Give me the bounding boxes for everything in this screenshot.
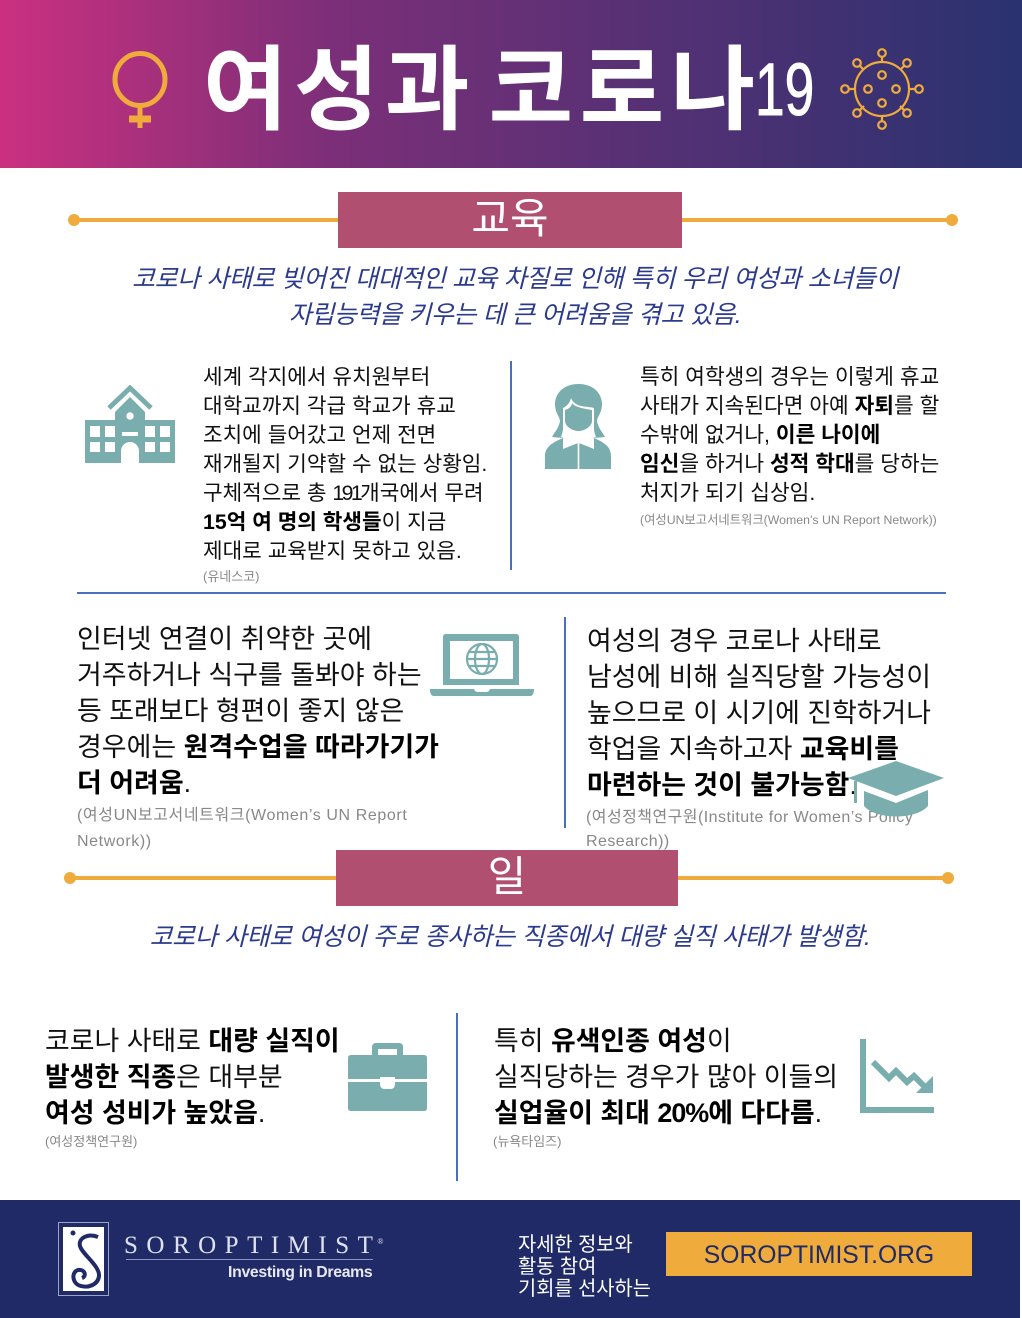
footer text: 자세한 정보와 [518,1234,633,1256]
title: 여성과 코로나 [203,40,762,142]
education intro: 자립능력을 키우는 데 큰 어려움을 겪고 있음. [289,301,741,329]
text: women of color: 특히 유색인종 여성이 [494,1026,732,1056]
text: remote learning: Network)) [77,833,152,850]
icon: graduation cap [848,761,944,816]
icon: virus [840,48,924,130]
text: remote learning: (여성UN보고서네트워크(Women’s UN Report [77,807,407,824]
logo wordmark: SOROPTIMIST® [124,1232,384,1259]
icon: female student [545,384,611,469]
text: school closures: 15억 여 명의 학생들이 지금 [203,510,446,534]
text: school closures: 제대로 교육받지 못하고 있음. [203,539,462,563]
education intro: 코로나 사태로 빚어진 대대적인 교육 차질로 인해 특히 우리 여성과 소녀들이 [132,265,898,293]
footer text [518,1234,651,1300]
text: tuition: (여성정책연구원(Institute for Women’s Policy [586,809,913,826]
text: remote learning: 거주하거나 식구를 돌봐야 하는 [77,660,422,690]
work intro: 코로나 사태로 여성이 주로 종사하는 직종에서 대량 실직 사태가 발생함. [150,923,870,951]
text: women of color: 실직당하는 경우가 많아 이들의 [494,1062,838,1092]
section divider: work [64,850,954,906]
text: job losses [45,1026,340,1149]
text: school closures: 조치에 들어갔고 언제 전면 [203,423,436,447]
header banner [0,0,1022,168]
text: school closures [203,365,487,584]
text: tuition: 여성의 경우 코로나 사태로 [587,626,882,656]
title number: 19 [755,48,814,131]
icon: laptop [430,634,534,696]
text: remote learning: 등 또래보다 형편이 좋지 않은 [77,696,404,726]
footer text: 활동 참여 [518,1256,596,1278]
text: women of color [493,1026,838,1149]
text: tuition: 마련하는 것이 불가능함. [587,770,857,800]
text: job losses: 코로나 사태로 대량 실직이 [45,1026,340,1056]
logo mark [58,1222,109,1296]
text: tuition: 높으므로 이 시기에 진학하거나 [587,698,931,728]
text: remote learning [77,624,439,850]
footer text: 기회를 선사하는 [518,1278,651,1300]
text: school closures: 구체적으로 총 191개국에서 무려 [203,481,484,505]
text: job losses: 여성 성비가 높았음. [45,1098,265,1128]
text: job losses: 발생한 직종은 대부분 [45,1062,283,1092]
text: female students: 처지가 되기 십상임. [640,481,815,505]
heading: work [336,850,678,906]
heading: education: 교육 [471,195,549,242]
text: job losses: (여성정책연구원) [45,1134,137,1149]
heading: education [338,192,682,248]
text: female students: 수밖에 없거나, 이른 나이에 [640,423,880,447]
icon: declining chart [860,1039,934,1113]
text: school closures: 세계 각지에서 유치원부터 [203,365,430,389]
text: women of color: (뉴욕타임즈) [493,1134,561,1149]
text: female students: (여성UN보고서네트워크(Women’s UN Report Network)) [640,513,937,527]
text: remote learning: 인터넷 연결이 취약한 곳에 [77,624,372,654]
text: remote learning: 더 어려움. [77,768,191,798]
text: tuition: 학업을 지속하고자 교육비를 [587,734,899,764]
heading: work: 일 [488,853,526,900]
text: school closures: 재개될지 기약할 수 없는 상황임. [203,452,487,476]
text: women of color: 실업율이 최대 20%에 다다름. [494,1098,822,1128]
icon: female symbol [112,51,168,128]
text: female students [640,365,939,527]
icon: briefcase [348,1043,427,1111]
text: tuition [586,626,931,850]
footer [0,1200,1020,1318]
text: tuition: 남성에 비해 실직당할 가능성이 [587,662,931,692]
logo tagline: Investing in Dreams [228,1264,372,1281]
text: school closures: (유네스코) [203,569,260,584]
footer button [666,1232,972,1276]
education intro [132,265,900,329]
text: female students: 임신을 하거나 성적 학대를 당하는 [640,452,939,476]
section divider: education [68,192,958,248]
text: remote learning: 경우에는 원격수업을 따라가기가 [77,732,439,762]
text: school closures: 대학교까지 각급 학교가 휴교 [203,394,456,418]
text: female students: 사태가 지속된다면 아예 자퇴를 할 [640,394,939,418]
footer button: SOROPTIMIST.ORG [704,1242,934,1269]
icon: school [85,385,175,463]
text: tuition: Research)) [586,833,670,850]
text: female students: 특히 여학생의 경우는 이렇게 휴교 [640,365,939,389]
